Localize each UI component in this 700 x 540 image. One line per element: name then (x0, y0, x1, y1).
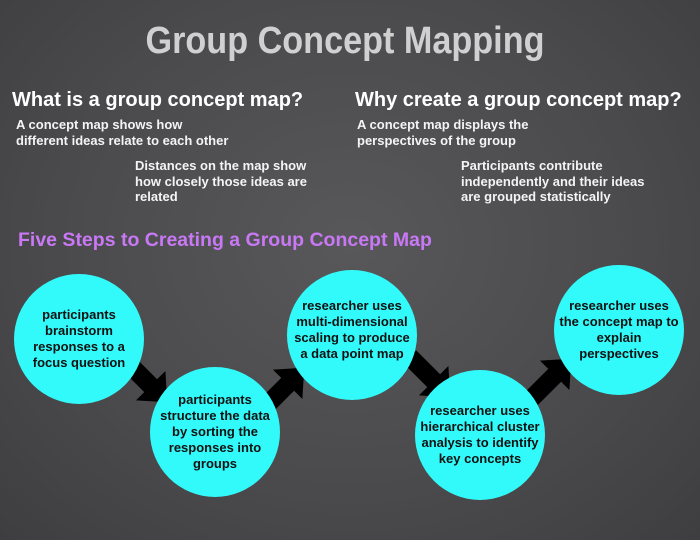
text: why 2: Participants contribute (461, 158, 603, 173)
step 2: participants (178, 392, 252, 407)
step 5: the concept map to (559, 314, 679, 329)
arrow 4 (516, 344, 586, 414)
text: what 2: related (135, 189, 178, 204)
title: Group Concept Mapping (146, 20, 544, 62)
step 1: brainstorm (45, 323, 113, 338)
step 2: by sorting the (172, 424, 258, 439)
heading: what: What is a group concept map? (12, 89, 303, 111)
step 1: focus question (33, 355, 125, 370)
text: why 1: perspectives of the group (357, 132, 516, 148)
step 2: groups (193, 456, 237, 471)
step 1: participants (42, 307, 116, 322)
step 4: key concepts (439, 451, 521, 466)
step 4 (415, 370, 545, 500)
step 3: researcher uses (302, 298, 402, 313)
step 3: multi-dimensional (296, 314, 408, 329)
text: what 2: how closely those ideas are (135, 174, 307, 188)
step 3: scaling to produce (294, 330, 410, 345)
arrow 2 (249, 353, 319, 423)
step 5 (554, 265, 684, 395)
text: what 1 (16, 117, 228, 148)
step 1 (14, 274, 144, 404)
text: why 1: A concept map displays the (357, 117, 528, 132)
arrow 3 (395, 342, 465, 412)
text: what 1: A concept map shows how (16, 117, 182, 132)
step 5: perspectives (579, 346, 659, 361)
heading: five steps: Five Steps to Creating a Group Concept Map (18, 229, 432, 251)
step 3 (287, 270, 417, 400)
step 3: a data point map (300, 346, 404, 361)
step 4: researcher uses (430, 403, 530, 418)
step 4: analysis to identify (421, 435, 539, 450)
text: what 1: different ideas relate to each other (16, 132, 228, 148)
step 2: responses into (169, 440, 261, 455)
step 4: hierarchical cluster (420, 419, 540, 434)
text: what 2: Distances on the map show (135, 158, 306, 173)
text: why 1 (357, 117, 528, 148)
step 1: responses to a (33, 339, 125, 354)
step 5: researcher uses (569, 298, 669, 313)
text: why 2 (461, 158, 644, 204)
text: what 2 (135, 158, 307, 204)
step 2: structure the data (160, 408, 270, 423)
step 5: explain (597, 330, 641, 345)
step 2 (150, 367, 280, 497)
heading: why: Why create a group concept map? (355, 89, 682, 111)
arrow 1 (112, 347, 182, 417)
text: why 2: are grouped statistically (461, 189, 611, 204)
text: why 2: independently and their ideas (461, 174, 644, 188)
